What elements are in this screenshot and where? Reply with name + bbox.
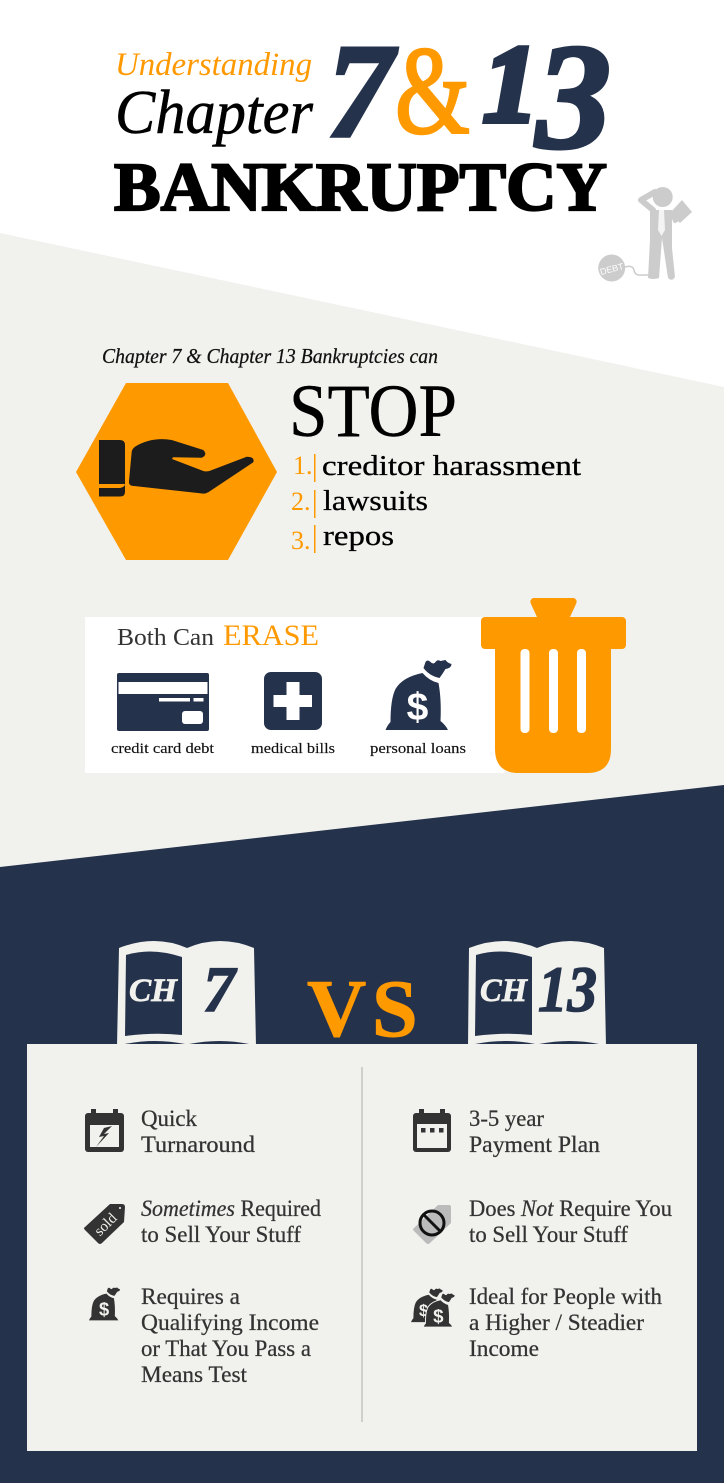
text: payment plan [469, 1106, 601, 1157]
icon: chapter 13 book: 13 [538, 954, 597, 1026]
label: medical bills: medical bills [251, 741, 335, 757]
icon: calendar with lightning [85, 1109, 124, 1152]
icon: chapter 7 book: 7 [203, 954, 237, 1026]
text: does not require: Does Not Require You [469, 1196, 672, 1221]
text: ideal for higher income: a Higher / Steadier [469, 1310, 644, 1335]
text: does not require [469, 1196, 672, 1247]
text: sometimes required to sell [141, 1196, 321, 1247]
icon: two money bags [411, 1288, 455, 1327]
icon: two money bags: $ [419, 1302, 428, 1320]
title: 3 [534, 14, 611, 180]
heading: both can erase [117, 619, 319, 652]
icon: small money bag: $ [99, 1299, 109, 1320]
background: light band [0, 233, 724, 870]
list: what bankruptcy stops: creditor harassment [322, 450, 581, 482]
icon: orange hexagon with open hand [76, 383, 277, 560]
label: personal loans: personal loans [370, 741, 466, 757]
list: what bankruptcy stops: 3. [291, 526, 310, 555]
text: payment plan: Payment Plan [469, 1132, 601, 1157]
icon: money bag [386, 660, 452, 730]
icon: calendar with dots [413, 1109, 451, 1152]
intro line: Chapter 7 & Chapter 13 Bankruptcies can [102, 344, 438, 368]
icon: medical cross [264, 672, 322, 730]
text: quick turnaround [141, 1106, 256, 1157]
text: sometimes required to sell: to Sell Your Stuff [141, 1222, 301, 1247]
heading: both can erase: ERASE [223, 619, 319, 652]
icon: sold tag [84, 1204, 125, 1244]
icon: chapter 13 book: CH [480, 973, 528, 1009]
background: navy band [0, 785, 724, 1483]
title [114, 14, 611, 225]
icon: sold tag: sold [91, 1210, 121, 1240]
heading: STOP: STOP [289, 370, 457, 453]
list: what bankruptcy stops [291, 450, 581, 555]
panel: both can erase [85, 617, 505, 773]
list: what bankruptcy stops: repos [323, 520, 394, 552]
title: 1 [483, 23, 538, 145]
icon: two money bags: $ [433, 1305, 444, 1326]
title: & [395, 22, 470, 161]
icon: man with debt ball and chain [598, 187, 692, 282]
heading: VS: VS [307, 963, 418, 1054]
icon: chapter 13 book [468, 941, 606, 1046]
list: what bankruptcy stops: 1. [293, 451, 312, 480]
icon: man with debt ball and chain: DEBT [599, 261, 625, 277]
icon: credit card [117, 673, 209, 731]
list: what bankruptcy stops: lawsuits [323, 485, 428, 517]
text: quick turnaround: Turnaround [141, 1132, 256, 1157]
text: ideal for higher income [469, 1284, 662, 1361]
text: ideal for higher income: Income [469, 1336, 539, 1361]
panel: comparison [27, 1044, 697, 1451]
title: 7 [327, 17, 398, 165]
icon: trash can [481, 598, 626, 773]
icon: chapter 7 book: CH [129, 973, 178, 1009]
text: ideal for higher income: Ideal for People with [469, 1284, 662, 1309]
icon: crossed-out tag [413, 1205, 451, 1244]
text: does not require: to Sell Your Stuff [469, 1222, 628, 1247]
text: quick turnaround: Quick [141, 1106, 197, 1131]
heading: both can erase: Both Can [117, 625, 214, 651]
text: qualifying income [141, 1284, 319, 1387]
icon: small money bag [89, 1287, 120, 1320]
icon: money bag: $ [407, 686, 429, 729]
title: Understanding [115, 47, 312, 83]
label: credit card debt: credit card debt [111, 741, 214, 757]
text: qualifying income: or That You Pass a [141, 1336, 311, 1361]
text: qualifying income: Requires a [141, 1284, 240, 1309]
title: BANKRUPTCY [114, 149, 607, 225]
title: Chapter [115, 79, 314, 147]
list: what bankruptcy stops: 2. [291, 487, 310, 516]
text: qualifying income: Means Test [141, 1362, 248, 1387]
text: payment plan: 3-5 year [469, 1106, 544, 1131]
icon: chapter 7 book [117, 941, 256, 1046]
text: sometimes required to sell: Sometimes Required [141, 1196, 321, 1221]
text: qualifying income: Qualifying Income [141, 1310, 319, 1335]
